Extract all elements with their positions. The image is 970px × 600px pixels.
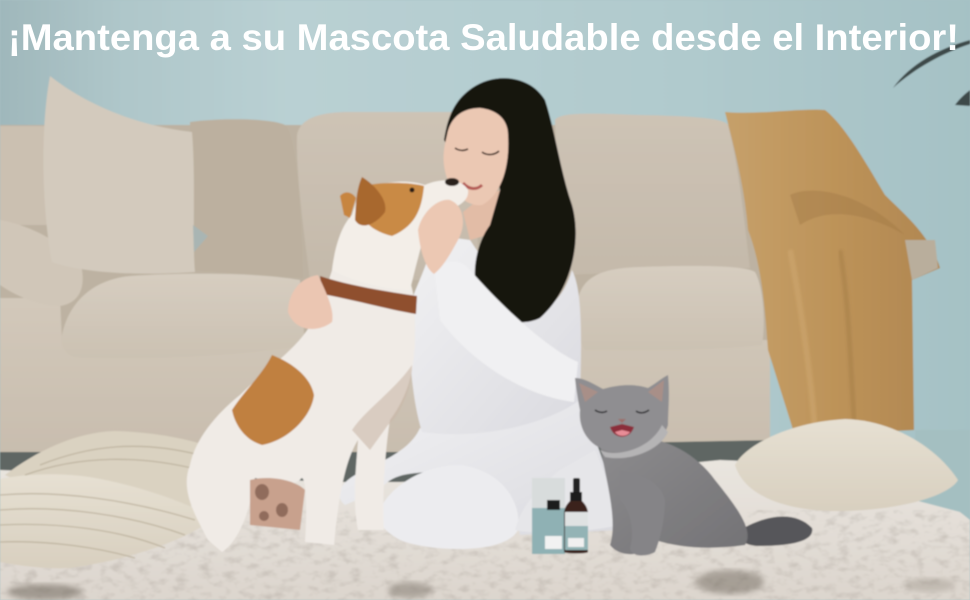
back cushion left [190,119,303,278]
blanket [725,110,940,436]
back paw patch [250,478,305,530]
product box [532,478,565,554]
left arm [0,126,48,225]
woman hand on dog [418,200,463,274]
front legs [620,470,665,555]
rug [0,460,970,600]
sleeve [434,261,578,402]
face [444,108,508,205]
floor cushions left [0,431,212,568]
floor cushion right [735,419,958,511]
back cushion middle [297,112,480,280]
arm roll [0,220,83,306]
shin [515,450,620,532]
plant leaves [893,40,970,106]
hair [444,78,576,322]
sofa backing [0,125,770,452]
woman [339,78,620,549]
thigh [378,465,518,549]
head orange [358,183,424,236]
collar [320,276,417,314]
product dropper bottle [564,478,588,554]
seat cushion right [577,266,764,350]
chest [600,425,668,458]
facial features [455,148,499,189]
body [187,230,415,552]
dog [187,177,468,552]
face side hair [490,100,535,250]
body [600,437,748,554]
eyes [595,410,649,413]
orange patch [232,355,314,445]
sofa [0,76,770,452]
throw pillow [43,76,195,274]
head [575,375,669,453]
tail [740,516,812,546]
trousers [339,400,620,535]
floor strip [0,440,920,530]
ears inner [579,383,598,402]
title: ¡Mantenga a su Mascota Saludable desde el Interior! [8,16,959,58]
ear [355,177,385,225]
neck [463,190,500,240]
sweatshirt [407,235,581,434]
mouth [610,424,634,437]
floor right teal [915,430,970,526]
back cushion right [555,114,750,275]
cat [575,375,812,555]
seat cushion left [62,274,305,358]
sofa base [0,298,770,452]
belly shading [352,365,412,450]
head [332,180,468,290]
woman hand on collar [288,275,333,329]
